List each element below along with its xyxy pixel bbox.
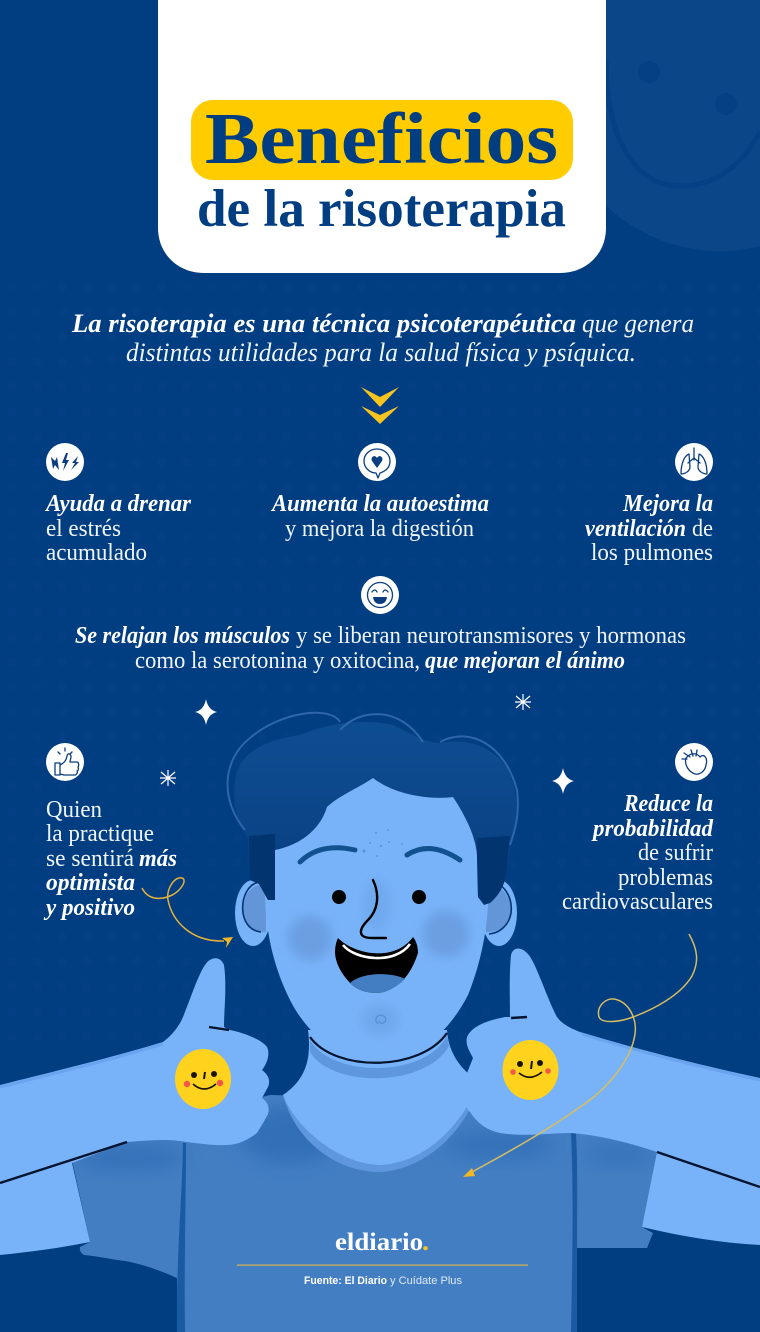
benefit: músculos y ánimo [75,623,686,674]
benefit: optimismo: más [139,846,177,872]
benefit: cardiovascular: Reduce la [623,791,713,817]
benefit: estrés [44,491,192,566]
benefit: optimismo: y positivo [43,895,135,921]
benefit: estrés: el estrés [46,516,121,542]
left arm and hand [0,958,269,1255]
benefit: autoestima: Aumenta la autoestima [270,491,489,517]
benefit: pulmones: Mejora la [622,491,713,517]
shirt [72,1095,660,1332]
icon: double chevron arrow [361,387,399,424]
nose [361,880,386,938]
benefit: pulmones: ventilación [585,516,686,542]
cheeks [288,916,332,960]
benefit: cardiovascular: problemas [618,865,713,891]
benefit: optimismo: la practique [46,821,154,847]
benefit: optimismo [43,797,177,921]
footer divider [237,1264,528,1266]
benefit: músculos y ánimo: como la serotonina y oxitocina, [135,648,420,674]
benefit: músculos y ánimo: Se relajan los músculos [75,623,290,649]
right arm and hand [466,949,760,1245]
eyebrows [300,848,355,862]
left ear [235,880,271,946]
benefit: cardiovascular [562,791,714,915]
benefit: músculos y ánimo: y se liberan neurotransmisores y hormonas [296,623,686,649]
benefit: cardiovascular: probabilidad [591,816,714,842]
benefit: músculos y ánimo: que mejoran el ánimo [425,648,625,674]
benefit: cardiovascular: de sufrir [638,840,713,866]
benefit: pulmones: de [692,516,713,542]
arrow: right curl [463,934,697,1177]
icon: heart organ [675,743,713,781]
benefit: optimismo: Quien [46,797,102,823]
title card [158,0,606,273]
benefit: optimismo: optimista [46,870,135,896]
icon: heart speech bubble [358,443,396,481]
source: y Cuídate Plus [390,1275,462,1287]
icon: thumbs up [46,743,84,781]
arrow: left curl [142,878,233,948]
hair sketch lines [228,713,518,845]
sparkles [160,694,574,794]
neck [283,1030,472,1172]
title: Beneficios [205,98,558,179]
icon: laughing face [361,576,399,614]
mouth [335,937,418,993]
benefit: estrés: acumulado [46,540,147,566]
title highlight pill [191,100,573,180]
benefit: estrés: Ayuda a drenar [44,491,192,517]
hair [234,722,517,905]
eyes [332,890,346,904]
intro text: distintas utilidades para la salud física y psíquica. [126,338,636,367]
source: Fuente: El Diario [304,1275,387,1287]
logo: eldiario: . [422,1229,429,1256]
logo: eldiario: eldiario [335,1229,423,1256]
sideburn shadows [249,834,510,903]
left hand smiley [175,1049,231,1109]
benefit: pulmones: los pulmones [591,540,713,566]
benefit: optimismo: se sentirá [46,846,134,872]
subtitle: de la risoterapia [197,180,566,238]
benefit: pulmones [585,491,713,566]
illustration: person giving thumbs up [0,713,760,1332]
intro text [71,309,694,367]
right ear [481,880,517,946]
jaw line [310,1033,447,1063]
face [265,775,488,1062]
icon: lungs [675,443,713,481]
right hand smiley [502,1040,558,1100]
source [304,1275,462,1287]
benefit: autoestima [270,491,489,542]
benefit: cardiovascular: cardiovasculares [562,889,713,915]
intro text: que genera [582,309,694,338]
intro text: La risoterapia es una técnica psicoterapéutica [71,309,576,338]
freckles [362,829,403,857]
decorative smiley background [554,0,760,251]
icon: lightning bolts [46,443,84,481]
chin swirl [362,1005,398,1035]
benefit: autoestima: y mejora la digestión [285,516,474,542]
